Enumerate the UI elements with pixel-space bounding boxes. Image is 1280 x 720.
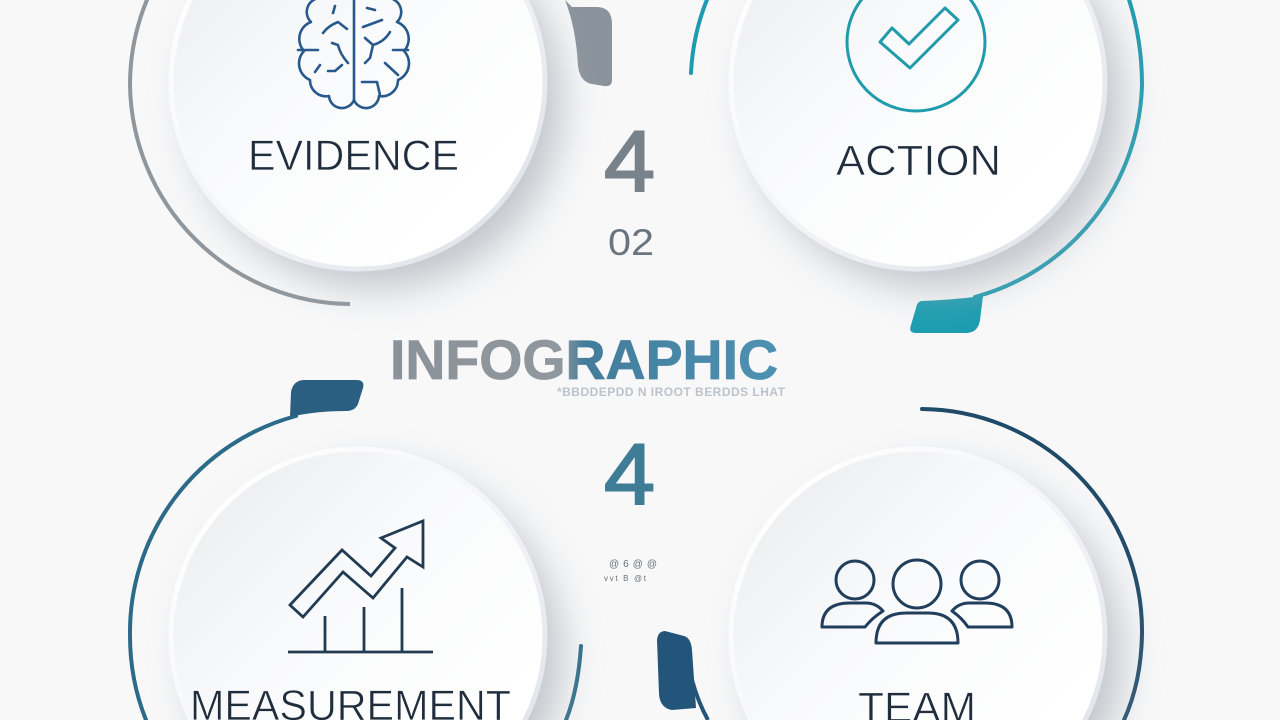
tab: team [657,631,696,710]
icon: brain [298,0,409,108]
icon: people [822,560,1012,643]
number: lower four: 4 [604,427,655,523]
disc: action [731,0,1105,269]
number: upper four: 4 [604,114,655,210]
arc: action ring [691,0,1142,297]
arc: measurement ring [130,416,581,720]
arc: team ring [922,409,1142,720]
tab: evidence [565,0,612,86]
disc: measurement [171,449,545,720]
tiny text: vvt B @t [604,574,647,583]
disc: team [731,449,1105,720]
tiny text [604,559,657,583]
label: action: ACTION [836,137,1001,185]
panel: action [691,0,1142,333]
label: evidence: EVIDENCE [248,132,459,180]
disc: evidence [171,0,545,269]
icon: check circle [847,0,985,111]
panel: measurement [130,380,581,720]
tab: action [910,296,983,333]
tiny text: @ 6 @ @ [609,559,657,570]
number: 02: 02 [608,222,654,263]
icon: growth chart [288,521,433,652]
subtitle: *BBDDEPDD N IROOT BERDDS LHAT [557,385,786,399]
arc: evidence ring [130,0,350,304]
tab: measurement [290,380,363,417]
panel: team [657,409,1142,720]
panel: evidence [130,0,612,304]
title: INFOGRAPHIC [390,328,778,391]
